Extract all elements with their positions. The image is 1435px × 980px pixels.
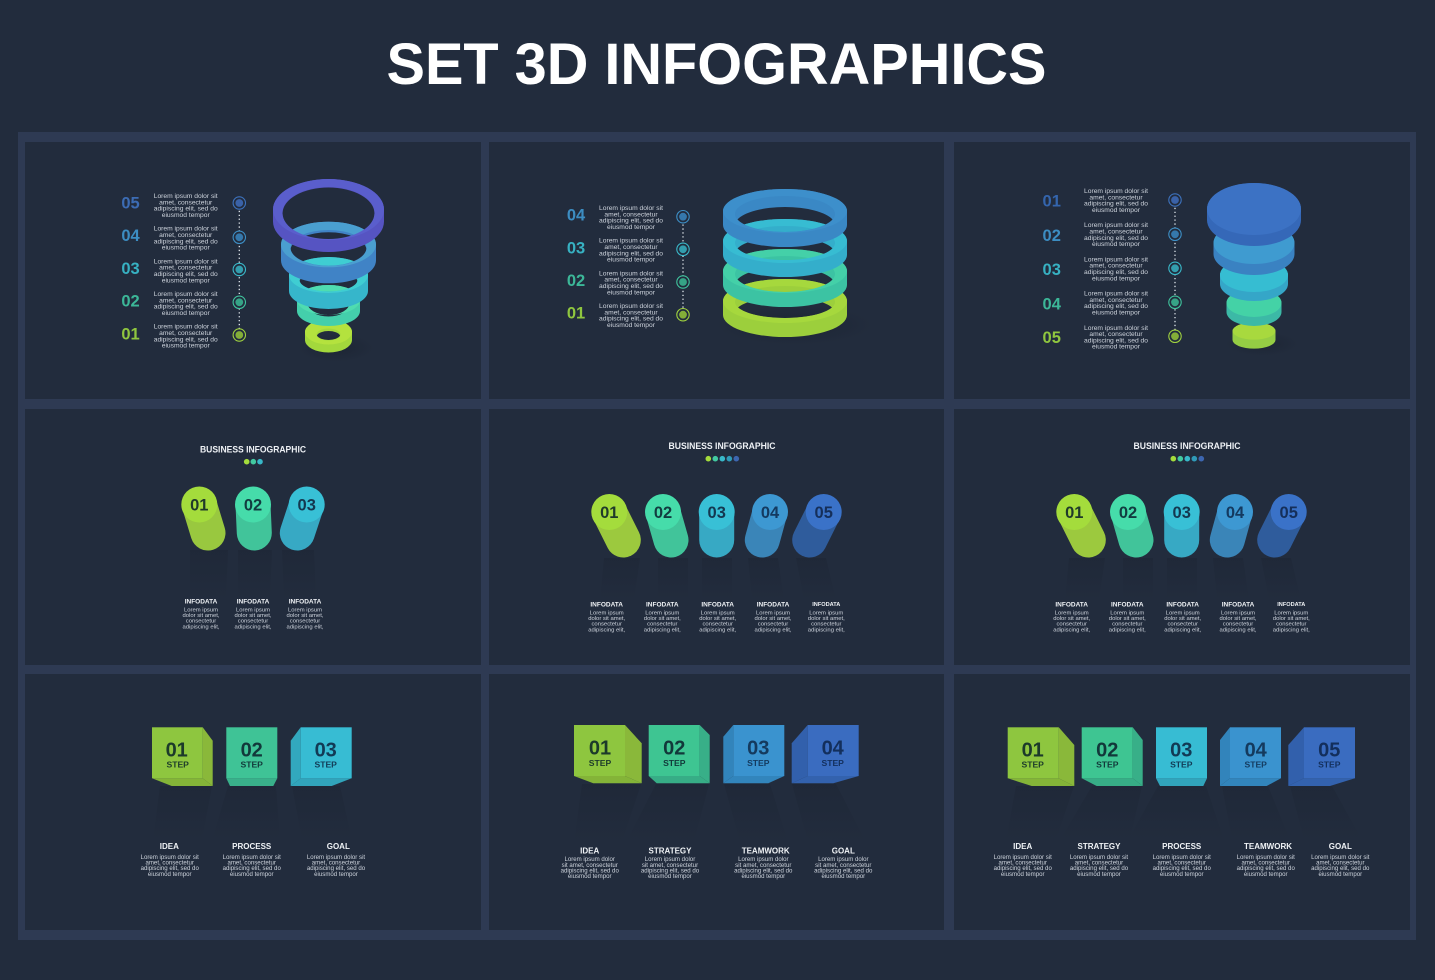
cube 04: 04 <box>822 738 845 760</box>
captions: Lorem ipsum dolor sit <box>1070 854 1128 861</box>
captions: Lorem ipsum <box>184 608 218 614</box>
captions: adipiscing elit, <box>234 624 272 630</box>
cube 04: STEP <box>1244 760 1267 770</box>
cube 01 <box>152 727 213 786</box>
captions: INFODATA <box>1166 602 1199 608</box>
captions: eiusmod tempor <box>648 873 692 880</box>
step descriptions: Lorem ipsum dolor sit <box>599 270 663 277</box>
captions: adipiscing elit, <box>1219 627 1257 633</box>
cube 04: 04 <box>1245 740 1268 762</box>
step descriptions: adipiscing elit, sed do <box>1084 337 1148 344</box>
captions: sit amet, consectetur <box>562 862 618 869</box>
captions: adipiscing elit, sed do <box>1311 865 1370 872</box>
step numbers: 05 <box>121 194 140 212</box>
step descriptions: Lorem ipsum dolor sit <box>1084 325 1148 332</box>
cube shadows <box>153 786 352 840</box>
step descriptions: eiusmod tempor <box>1092 275 1141 282</box>
panel: funnel of rings <box>25 142 481 399</box>
cylinder 01: 01 <box>190 496 208 514</box>
step descriptions: amet, consectetur <box>604 309 658 316</box>
cube 05 <box>1288 727 1355 786</box>
captions: dolor sit amet, <box>1220 616 1257 622</box>
captions: eiusmod tempor <box>821 873 865 880</box>
captions: Lorem ipsum <box>288 608 322 614</box>
step descriptions: adipiscing elit, sed do <box>1084 235 1148 242</box>
cylinder 01 <box>181 486 217 533</box>
cylinder 02 <box>645 494 681 540</box>
cube 03: 03 <box>1170 740 1192 762</box>
captions: Lorem ipsum dolor sit <box>307 854 365 861</box>
captions <box>588 602 845 633</box>
panel: five cylinders B <box>954 409 1410 665</box>
step numbers: 03 <box>121 260 140 278</box>
cylinder 03: 03 <box>298 496 316 514</box>
captions: Lorem ipsum <box>756 610 790 616</box>
captions: Lorem ipsum <box>1221 610 1255 616</box>
captions: dolor sit amet, <box>1273 616 1310 622</box>
captions: dolor sit amet, <box>754 616 792 622</box>
captions: STRATEGY <box>1078 842 1121 851</box>
cube 02: STEP <box>663 758 686 768</box>
captions: GOAL <box>832 847 855 856</box>
captions: sit amet, consectetur <box>642 862 698 869</box>
step numbers: 04 <box>121 227 140 245</box>
cylinder 01: 01 <box>600 504 618 522</box>
step numbers: 04 <box>567 206 586 224</box>
cylinder 05 <box>1271 494 1307 540</box>
step numbers: 03 <box>1043 261 1061 279</box>
cylinder 04: 04 <box>1226 504 1245 522</box>
captions: adipiscing elit, sed do <box>641 867 700 874</box>
captions: sit amet, consectetur <box>735 862 791 869</box>
cube 03: 03 <box>315 740 337 762</box>
captions: sit amet, consectetur <box>815 862 871 869</box>
step descriptions: Lorem ipsum dolor sit <box>154 291 218 298</box>
captions: INFODATA <box>1277 602 1305 608</box>
step descriptions: eiusmod tempor <box>607 257 656 264</box>
captions: adipiscing elit, <box>644 627 681 633</box>
captions: IDEA <box>160 842 179 851</box>
captions: dolor sit amet, <box>644 616 681 622</box>
step descriptions: adipiscing elit, sed do <box>599 283 663 290</box>
captions: amet, consectetur <box>1075 860 1123 866</box>
cube 02: STEP <box>1096 760 1119 770</box>
step descriptions: Lorem ipsum dolor sit <box>599 205 663 212</box>
captions: consectetur <box>1223 622 1253 628</box>
captions: dolor sit amet, <box>808 616 845 622</box>
captions: consectetur <box>238 619 268 625</box>
step descriptions <box>599 205 663 329</box>
cube 01: 01 <box>166 740 188 762</box>
captions: dolor sit amet, <box>588 616 626 622</box>
cube 03: STEP <box>747 758 770 768</box>
cylinder 03: 03 <box>708 504 726 522</box>
step descriptions: adipiscing elit, sed do <box>154 206 218 213</box>
step descriptions: eiusmod tempor <box>162 343 210 350</box>
panel: stacked rings <box>489 142 944 399</box>
captions: PROCESS <box>1162 842 1202 851</box>
cube 04 <box>1220 727 1281 786</box>
step numbers: 01 <box>121 325 140 343</box>
funnel rings <box>273 179 384 362</box>
step descriptions: Lorem ipsum dolor sit <box>1084 188 1148 195</box>
step descriptions: eiusmod tempor <box>162 310 210 317</box>
step descriptions: Lorem ipsum dolor sit <box>154 193 218 200</box>
step descriptions: eiusmod tempor <box>1092 207 1141 214</box>
captions: adipiscing elit, sed do <box>1237 865 1295 872</box>
panel: five cylinders A <box>489 409 944 665</box>
timeline dots <box>677 210 689 321</box>
captions: Lorem ipsum <box>1166 610 1200 616</box>
step descriptions: Lorem ipsum dolor sit <box>154 226 218 233</box>
step descriptions: amet, consectetur <box>1089 297 1143 304</box>
captions: Lorem ipsum <box>645 610 679 616</box>
cube shadows <box>1006 786 1362 840</box>
step numbers: 03 <box>567 239 585 257</box>
step descriptions: eiusmod tempor <box>162 212 210 219</box>
captions: INFODATA <box>237 598 270 606</box>
cube 01 <box>1008 727 1074 786</box>
cube 03 <box>291 727 352 786</box>
cube 01: STEP <box>166 760 189 770</box>
captions: Lorem ipsum <box>701 610 735 616</box>
captions: eiusmod tempor <box>148 871 192 878</box>
captions: Lorem ipsum dolor sit <box>1153 854 1211 861</box>
captions: consectetur <box>591 622 622 628</box>
captions: amet, consectetur <box>145 860 194 866</box>
step descriptions: amet, consectetur <box>604 277 658 284</box>
cube 03 <box>723 725 784 783</box>
step descriptions: amet, consectetur <box>159 297 213 304</box>
captions: Lorem ipsum dolor <box>564 856 615 863</box>
captions: adipiscing elit, <box>286 624 324 630</box>
step numbers: 01 <box>1043 193 1061 211</box>
cylinder 01 <box>591 494 627 540</box>
captions: Lorem ipsum <box>1274 610 1308 616</box>
cube 02: 02 <box>241 740 263 762</box>
panel: three cylinders <box>25 409 481 665</box>
captions <box>561 847 873 880</box>
captions: adipiscing elit, <box>1273 627 1310 633</box>
color dots <box>1170 456 1204 462</box>
cylinder 02 <box>1110 494 1146 540</box>
captions: adipiscing elit, <box>1164 627 1202 633</box>
stacked discs <box>1207 183 1301 356</box>
cube 01: 01 <box>589 738 611 760</box>
step descriptions: eiusmod tempor <box>607 322 656 329</box>
step descriptions: amet, consectetur <box>1089 194 1143 201</box>
cube 02 <box>1082 727 1143 786</box>
cylinder 02: 02 <box>244 496 262 514</box>
captions: Lorem ipsum <box>236 608 270 614</box>
captions: Lorem ipsum dolor <box>738 856 789 863</box>
captions: dolor sit amet, <box>699 616 737 622</box>
step numbers: 02 <box>567 272 585 290</box>
cylinder 04 <box>752 494 788 540</box>
timeline dots <box>233 197 246 341</box>
step descriptions: adipiscing elit, sed do <box>599 250 663 257</box>
cylinder 03 <box>699 494 735 540</box>
step descriptions: amet, consectetur <box>1089 263 1143 270</box>
step descriptions: Lorem ipsum dolor sit <box>154 324 218 331</box>
cube 02 <box>649 725 710 783</box>
step descriptions: adipiscing elit, sed do <box>599 218 663 225</box>
captions: adipiscing elit, <box>588 627 626 633</box>
cube shadows <box>574 784 866 842</box>
captions: Lorem ipsum dolor sit <box>141 854 199 861</box>
step descriptions: amet, consectetur <box>604 244 658 251</box>
captions: adipiscing elit, sed do <box>141 865 199 872</box>
step descriptions: adipiscing elit, sed do <box>1084 269 1148 276</box>
captions: amet, consectetur <box>998 860 1047 866</box>
step descriptions: Lorem ipsum dolor sit <box>1084 222 1148 229</box>
step numbers: 04 <box>1043 295 1062 313</box>
cylinder 03 <box>289 486 325 533</box>
captions: Lorem ipsum dolor sit <box>223 854 281 861</box>
captions: dolor sit amet, <box>1053 616 1091 622</box>
captions: adipiscing elit, <box>808 627 845 633</box>
title: SET 3D INFOGRAPHICS <box>386 32 1046 97</box>
cylinder 03 <box>1164 494 1200 540</box>
captions <box>182 598 324 630</box>
captions: adipiscing elit, sed do <box>307 865 366 872</box>
step numbers <box>121 194 140 343</box>
captions: adipiscing elit, <box>754 627 792 633</box>
captions: Lorem ipsum dolor sit <box>1311 854 1370 861</box>
captions: consectetur <box>186 619 216 625</box>
cube 03 <box>1156 727 1207 786</box>
cylinder 05 <box>806 494 842 540</box>
step descriptions <box>154 193 218 350</box>
captions: INFODATA <box>185 598 218 606</box>
color dots <box>706 456 739 462</box>
captions: eiusmod tempor <box>741 873 785 880</box>
captions: amet, consectetur <box>1157 860 1206 866</box>
captions: amet, consectetur <box>312 860 360 866</box>
captions: dolor sit amet, <box>182 613 220 619</box>
captions: adipiscing elit, sed do <box>734 867 793 874</box>
step numbers: 05 <box>1043 329 1061 347</box>
cube 01 <box>574 725 642 783</box>
captions: amet, consectetur <box>1241 860 1290 866</box>
step descriptions: adipiscing elit, sed do <box>154 304 218 311</box>
stacked rings <box>717 189 873 345</box>
captions: consectetur <box>702 622 733 628</box>
captions: Lorem ipsum <box>590 610 624 616</box>
cube 03: 03 <box>747 738 769 760</box>
cylinder 05: 05 <box>1280 504 1298 522</box>
step numbers: 01 <box>567 305 585 323</box>
cube 02 <box>226 727 277 786</box>
captions: dolor sit amet, <box>1164 616 1202 622</box>
captions: dolor sit amet, <box>1109 616 1146 622</box>
step descriptions: eiusmod tempor <box>607 289 656 296</box>
step descriptions: adipiscing elit, sed do <box>599 316 663 323</box>
cube 04: STEP <box>821 758 844 768</box>
step descriptions: Lorem ipsum dolor sit <box>599 238 663 245</box>
captions: adipiscing elit, sed do <box>1153 865 1211 872</box>
captions: adipiscing elit, <box>1109 627 1146 633</box>
captions: eiusmod tempor <box>230 871 274 878</box>
captions: adipiscing elit, sed do <box>1070 865 1129 872</box>
captions: adipiscing elit, <box>699 627 737 633</box>
captions: adipiscing elit, sed do <box>814 867 873 874</box>
captions: eiusmod tempor <box>1160 871 1204 878</box>
step descriptions <box>1084 188 1148 351</box>
captions: PROCESS <box>232 842 272 851</box>
captions: eiusmod tempor <box>1244 871 1288 878</box>
panel: stacked discs <box>954 142 1410 399</box>
panel: five cubes <box>954 674 1410 930</box>
captions: eiusmod tempor <box>1077 871 1121 878</box>
captions: Lorem ipsum dolor <box>645 856 695 863</box>
captions: INFODATA <box>1222 602 1255 608</box>
cube 04 <box>792 725 859 783</box>
cube 01: STEP <box>589 758 611 768</box>
step descriptions: amet, consectetur <box>604 211 658 218</box>
cylinder 04: 04 <box>761 504 780 522</box>
captions: Lorem ipsum <box>1055 610 1089 616</box>
captions: consectetur <box>1112 622 1143 628</box>
step numbers <box>1043 193 1062 347</box>
step descriptions: eiusmod tempor <box>1092 241 1141 248</box>
captions: adipiscing elit, <box>1053 627 1091 633</box>
heading: BUSINESS INFOGRAPHIC <box>200 444 306 454</box>
captions: TEAMWORK <box>1244 842 1292 851</box>
step descriptions: eiusmod tempor <box>1092 310 1141 316</box>
cube 02: 02 <box>663 738 685 760</box>
panel: four cubes <box>489 674 944 930</box>
step descriptions: eiusmod tempor <box>607 224 656 231</box>
cube 03: STEP <box>314 760 337 770</box>
captions: eiusmod tempor <box>314 871 358 878</box>
captions: adipiscing elit, <box>182 624 220 630</box>
captions <box>1053 602 1310 633</box>
cylinder 03: 03 <box>1173 504 1191 522</box>
step descriptions: amet, consectetur <box>1089 331 1143 338</box>
captions: amet, consectetur <box>227 860 276 866</box>
captions: consectetur <box>758 622 788 628</box>
cube 01: 01 <box>1022 740 1044 762</box>
captions: INFODATA <box>701 602 734 608</box>
panel: three cubes <box>25 674 481 930</box>
captions: adipiscing elit, sed do <box>223 865 281 872</box>
cylinder shadows <box>600 558 836 600</box>
captions: Lorem ipsum dolor sit <box>994 854 1052 861</box>
heading: BUSINESS INFOGRAPHIC <box>668 441 776 451</box>
cylinder 04 <box>1217 494 1253 540</box>
captions: eiusmod tempor <box>1001 871 1045 878</box>
captions: IDEA <box>1013 842 1032 851</box>
captions: amet, consectetur <box>1316 860 1365 866</box>
captions: consectetur <box>290 619 320 625</box>
captions: INFODATA <box>590 602 623 608</box>
captions: INFODATA <box>646 602 679 608</box>
captions: dolor sit amet, <box>286 613 324 619</box>
captions: STRATEGY <box>649 847 692 856</box>
cylinder 02 <box>235 486 271 533</box>
heading: BUSINESS INFOGRAPHIC <box>1134 441 1241 451</box>
step descriptions: amet, consectetur <box>159 232 213 239</box>
step descriptions: amet, consectetur <box>159 330 213 337</box>
cylinder 02: 02 <box>1119 504 1137 522</box>
captions: adipiscing elit, sed do <box>561 867 619 874</box>
captions: INFODATA <box>757 602 790 608</box>
step descriptions: eiusmod tempor <box>162 277 210 284</box>
captions: eiusmod tempor <box>568 873 612 880</box>
captions: INFODATA <box>1111 602 1144 608</box>
step descriptions: Lorem ipsum dolor sit <box>599 303 663 310</box>
step descriptions: adipiscing elit, sed do <box>154 238 218 245</box>
captions: IDEA <box>580 847 599 856</box>
captions: GOAL <box>327 842 350 851</box>
captions: INFODATA <box>812 602 840 608</box>
cylinder shadows <box>190 550 316 600</box>
step descriptions: Lorem ipsum dolor sit <box>154 258 218 265</box>
captions: INFODATA <box>1055 602 1088 608</box>
captions: TEAMWORK <box>742 847 790 856</box>
cylinder 02: 02 <box>654 504 672 522</box>
step descriptions: adipiscing elit, sed do <box>154 336 218 343</box>
captions: adipiscing elit, sed do <box>994 865 1052 872</box>
step numbers <box>567 206 586 323</box>
captions <box>141 842 366 878</box>
step descriptions: adipiscing elit, sed do <box>154 271 218 278</box>
captions: consectetur <box>1056 622 1087 628</box>
cube 02: STEP <box>240 760 263 770</box>
cube 03: STEP <box>1170 760 1193 770</box>
captions: Lorem ipsum <box>809 610 843 616</box>
captions: consectetur <box>647 622 678 628</box>
step numbers: 02 <box>121 292 140 310</box>
step descriptions: amet, consectetur <box>159 199 213 206</box>
captions: consectetur <box>811 622 842 628</box>
step descriptions: Lorem ipsum dolor sit <box>1084 291 1148 298</box>
step descriptions: amet, consectetur <box>1089 228 1143 236</box>
step descriptions: amet, consectetur <box>159 265 213 272</box>
cube 01: STEP <box>1021 760 1044 770</box>
timeline dots <box>1169 194 1181 342</box>
cylinder 01 <box>1056 494 1092 540</box>
step descriptions: adipiscing elit, sed do <box>1084 303 1148 310</box>
captions: Lorem ipsum dolor <box>818 856 869 863</box>
step descriptions: eiusmod tempor <box>162 245 210 252</box>
step descriptions: eiusmod tempor <box>1092 344 1141 351</box>
cube 05: STEP <box>1318 760 1341 770</box>
cylinder 05: 05 <box>815 504 833 522</box>
cylinder shadows <box>1065 558 1301 600</box>
step descriptions: adipiscing elit, sed do <box>1084 201 1148 208</box>
cube 02: 02 <box>1096 740 1118 762</box>
captions: Lorem ipsum <box>1110 610 1144 616</box>
captions <box>994 842 1370 878</box>
cube 05: 05 <box>1318 740 1340 762</box>
captions: Lorem ipsum dolor sit <box>1237 854 1295 861</box>
color dots <box>244 459 263 465</box>
captions: consectetur <box>1167 622 1198 628</box>
step numbers: 02 <box>1043 227 1061 245</box>
captions: INFODATA <box>289 598 322 606</box>
captions: dolor sit amet, <box>234 613 272 619</box>
captions: consectetur <box>1276 622 1307 628</box>
captions: eiusmod tempor <box>1318 871 1362 878</box>
step descriptions: Lorem ipsum dolor sit <box>1084 256 1148 263</box>
captions: GOAL <box>1329 842 1352 851</box>
cylinder 01: 01 <box>1065 504 1083 522</box>
